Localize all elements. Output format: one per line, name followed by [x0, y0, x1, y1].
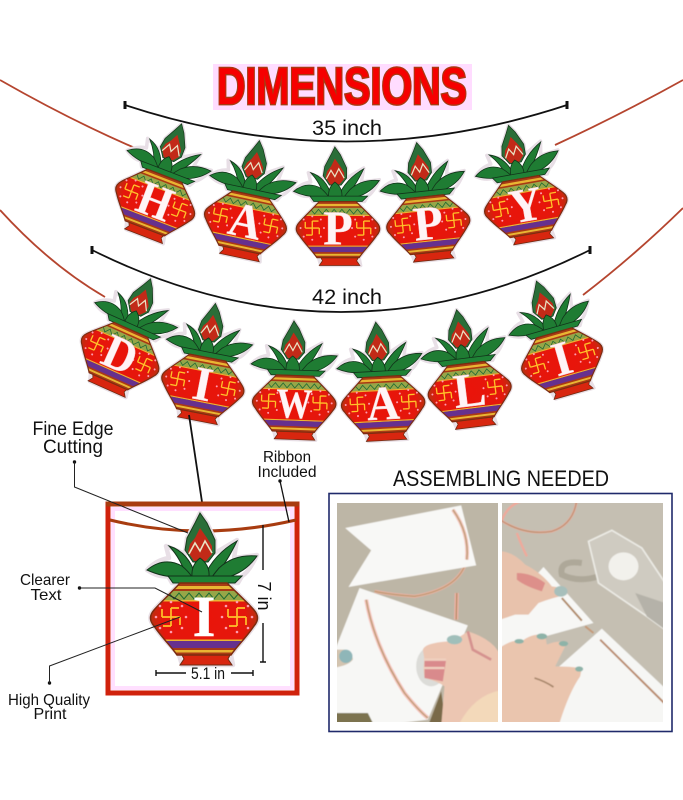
dimension: 5.1 in: 5.1 in: [191, 664, 225, 683]
ribbon: upper garland: [0, 80, 683, 148]
pennant I detail: I: [193, 584, 215, 649]
callout: fine edge cutting: Fine Edge: [32, 419, 114, 440]
pennant A: [332, 320, 432, 443]
dimension: 5.1 in: [156, 664, 253, 683]
connector line to detail box: [189, 415, 202, 502]
title: DIMENSIONS: [217, 58, 467, 116]
pennant I: [494, 267, 617, 407]
callout: high quality print: [8, 617, 180, 723]
ribbon: lower garland: [0, 208, 683, 297]
pennant W: [246, 319, 344, 441]
callout: fine edge cutting: [32, 419, 188, 533]
pennant H: H: [130, 171, 181, 232]
callout: high quality print: Print: [34, 706, 67, 723]
callout: ribbon included: [258, 449, 316, 522]
pennant Y: [465, 117, 578, 250]
pennant A: [192, 132, 308, 267]
pennant H: [98, 108, 228, 252]
pennant P: P: [411, 196, 446, 252]
callout: clearer text: Text: [30, 587, 62, 604]
pennant I: I: [189, 357, 217, 412]
pennant I: [150, 295, 264, 429]
pennant I detail: [144, 513, 264, 665]
pennant P: [291, 147, 385, 266]
pennant A: A: [365, 377, 401, 431]
pennant L: [413, 304, 521, 433]
dimension: 7 in: [254, 525, 274, 662]
pennant D: D: [94, 324, 146, 386]
panel: detail box: [106, 504, 299, 693]
pennant L: L: [450, 363, 489, 419]
callout: ribbon included: Ribbon: [263, 449, 311, 466]
callout: clearer text: [20, 572, 202, 612]
pennant D: [62, 261, 196, 407]
dimension: 42 inch: [92, 246, 590, 312]
pennant W: W: [275, 380, 313, 428]
pennant I: I: [546, 331, 578, 387]
pennant A: A: [224, 192, 267, 251]
pennant P: [373, 137, 479, 265]
garland: DIWALI: [62, 261, 617, 443]
dimension: 7 in: 7 in: [254, 581, 274, 611]
dimension: 42 inch: 42 inch: [312, 286, 382, 309]
callout: high quality print: High Quality: [8, 692, 90, 709]
heading: assembling needed: ASSEMBLING NEEDED: [393, 466, 609, 491]
callout: ribbon included: Included: [258, 464, 316, 481]
ribbon in box: [110, 520, 296, 531]
callout: clearer text: Clearer: [20, 572, 71, 589]
panel: assembling photos: [329, 494, 672, 732]
photo: threading ribbon: [337, 503, 498, 722]
callout: fine edge cutting: Cutting: [43, 437, 103, 458]
pennant Y: Y: [505, 177, 547, 235]
photo: taping ribbon: [502, 503, 663, 722]
garland: HAPPY: [98, 108, 578, 267]
pennant P: P: [323, 202, 353, 255]
dimension: 35 inch: 35 inch: [312, 117, 382, 140]
dimension: 35 inch: [125, 101, 567, 142]
